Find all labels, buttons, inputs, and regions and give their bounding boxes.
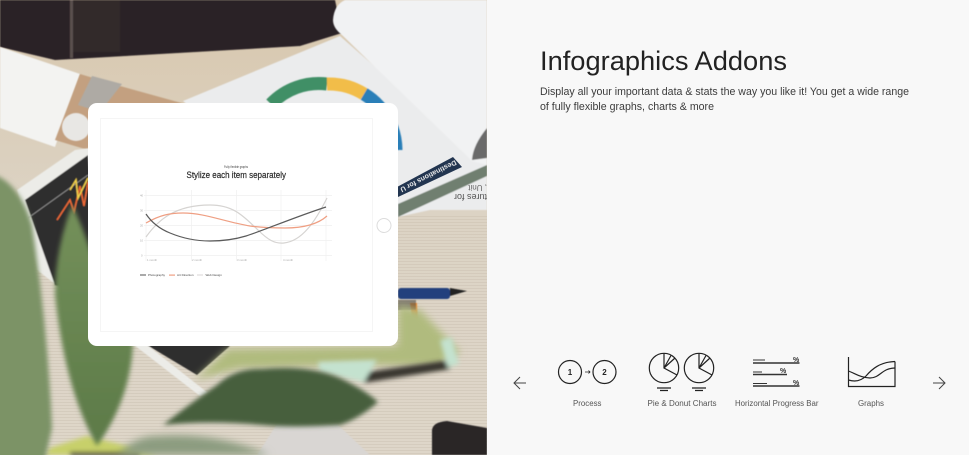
photo: arm [55, 74, 185, 150]
chart axis labels: 2 month [192, 258, 203, 262]
tablet screen frame [100, 118, 372, 332]
label: pie and donut charts: Pie & Donut Charts [648, 399, 716, 408]
chart legend: Art Direction [177, 273, 194, 277]
icon: process: 1 [568, 368, 573, 377]
photo: grey paper [257, 424, 370, 455]
tablet mockup [88, 103, 398, 346]
photo: blue pen [398, 287, 467, 316]
photo: magazine banner: , Unit [468, 183, 487, 192]
panel: desk photo [0, 0, 487, 455]
description text [540, 86, 909, 113]
photo: dark foreground leaf [163, 368, 378, 426]
chart axis labels: 10 [140, 238, 144, 242]
icon: horizontal progress bar: % [793, 357, 800, 364]
photo: lower blurred leaf [118, 435, 270, 455]
photo: wrist watch [62, 76, 122, 141]
chart axis labels: 40 [140, 194, 144, 198]
photo: dark jacket [0, 0, 342, 60]
icon: process: 2 [602, 368, 607, 377]
icon: process [558, 360, 616, 384]
tablet home button [377, 218, 391, 232]
series: photography [146, 207, 326, 241]
tablet body [88, 103, 398, 346]
photo: mint marker [318, 337, 459, 383]
photo: dark chart magazine [17, 148, 232, 396]
photo: white shirt sleeve [0, 47, 80, 147]
heading: Infographics Addons [540, 46, 787, 76]
photo: magazine banner: Destinations for U [399, 158, 457, 193]
chart axis labels: 20 [140, 224, 144, 228]
icon: horizontal progress bar: % [780, 368, 787, 375]
photo: plant pot [45, 436, 158, 455]
photo: magazine banner [397, 157, 487, 202]
description text: of fully flexible graphs, charts & more [540, 101, 714, 113]
photo: left plant leaf [0, 175, 52, 455]
chart title: Stylize each item separately [186, 170, 286, 180]
photo: pale green blurred leaf [195, 305, 460, 380]
icon: horizontal progress bar: % [793, 380, 800, 387]
photo: open magazine [183, 0, 487, 217]
photo: wooden desk [0, 0, 487, 455]
label: graphs: Graphs [858, 399, 884, 408]
icon: graphs [848, 357, 895, 386]
label: horizontal progress bar: Horizontal Progress Bar [735, 399, 819, 408]
label: process: Process [573, 399, 602, 408]
icon: horizontal progress bar [753, 357, 800, 387]
photo: magazine banner: tures for [454, 192, 487, 202]
chart subtitle: Fully flexible graphs [224, 165, 248, 169]
series: art direction [146, 213, 327, 228]
panel: text and icons background [487, 0, 969, 455]
photo: donut chart on magazine [271, 83, 396, 150]
line chart [140, 190, 332, 262]
arrow: previous [514, 377, 526, 389]
series: web design [146, 198, 327, 243]
chart axis labels: 0 [141, 254, 143, 258]
chart axis labels: 4 month [283, 258, 294, 262]
photo: second plant leaf [55, 205, 133, 446]
chart legend: Web Design [206, 273, 222, 277]
description text: Display all your important data & stats the way you like it! You get a wide range [540, 86, 909, 98]
arrow: next [933, 377, 945, 389]
chart axis labels: 3 month [237, 258, 248, 262]
chart axis labels: 30 [140, 208, 144, 212]
icon: pie and donut charts [649, 353, 714, 390]
chart axis labels [140, 194, 294, 262]
chart legend [140, 274, 222, 276]
photo: dark phone [432, 421, 487, 455]
chart axis labels: 1 month [147, 258, 158, 262]
chart legend: Photography [148, 273, 166, 277]
